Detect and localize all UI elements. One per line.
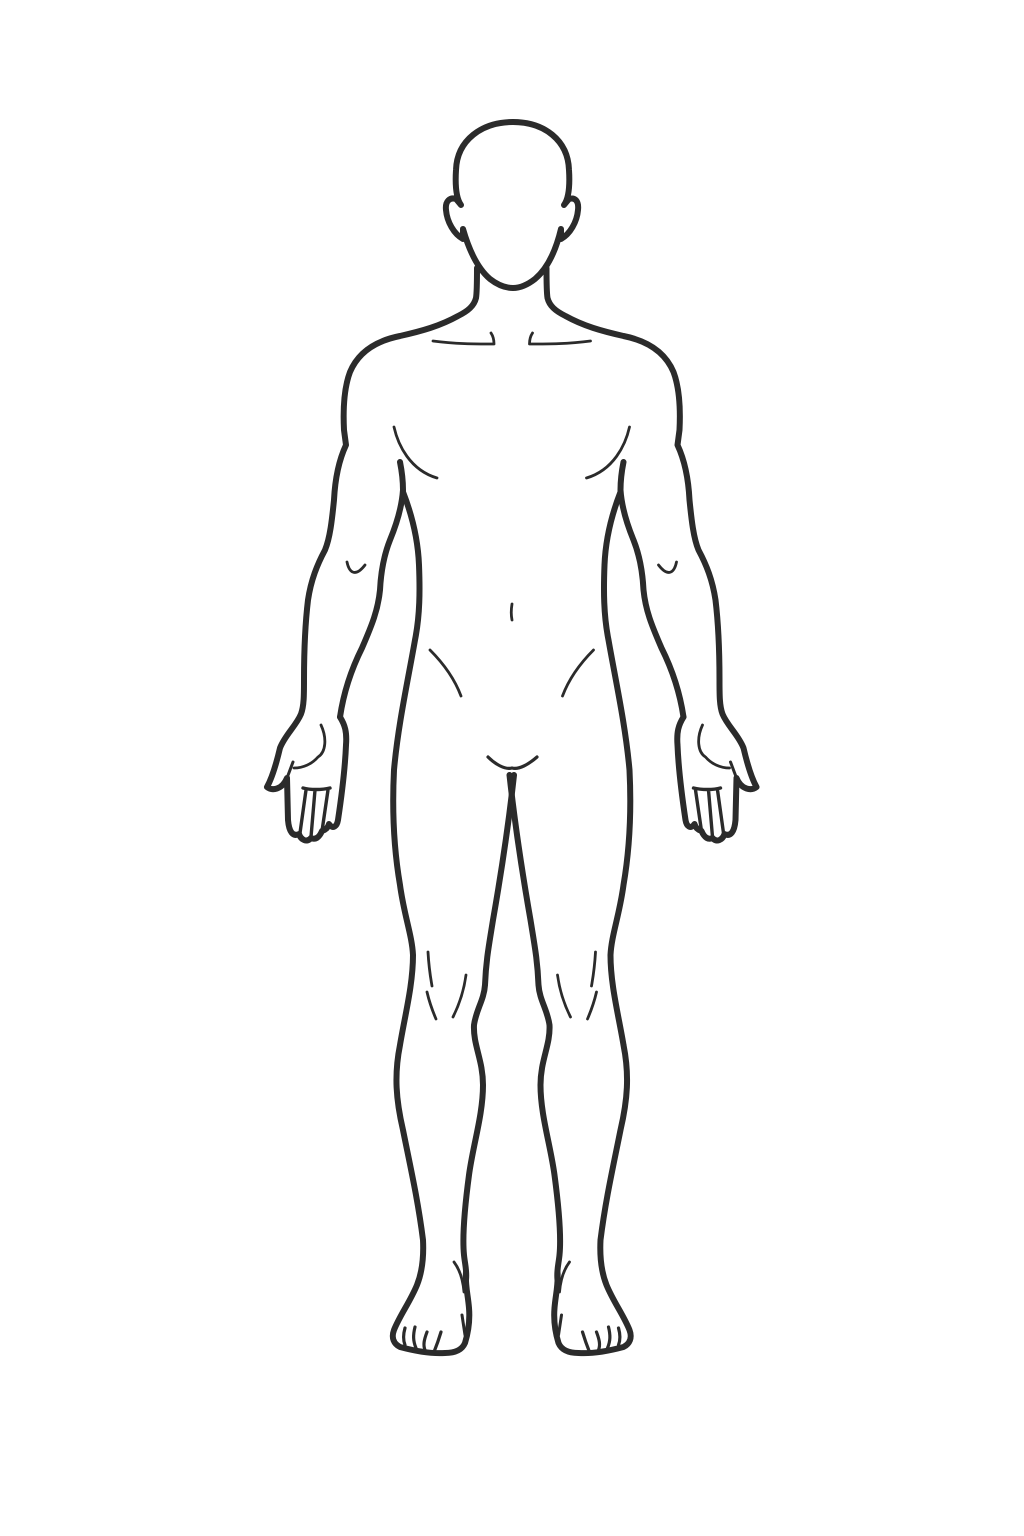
neck and shoulder to arm	[267, 268, 477, 841]
left half of body	[267, 268, 514, 1353]
thumb spur	[287, 762, 293, 778]
navel	[510, 604, 513, 620]
groin line	[488, 757, 537, 768]
right half of body (mirror)	[510, 268, 756, 1353]
anatomical detail lines, right	[530, 333, 730, 1352]
anatomical detail lines, left	[294, 333, 494, 1352]
inner leg	[463, 775, 514, 1280]
torso side and outer leg	[393, 492, 469, 1353]
head	[446, 122, 578, 288]
inner arm	[340, 462, 403, 717]
